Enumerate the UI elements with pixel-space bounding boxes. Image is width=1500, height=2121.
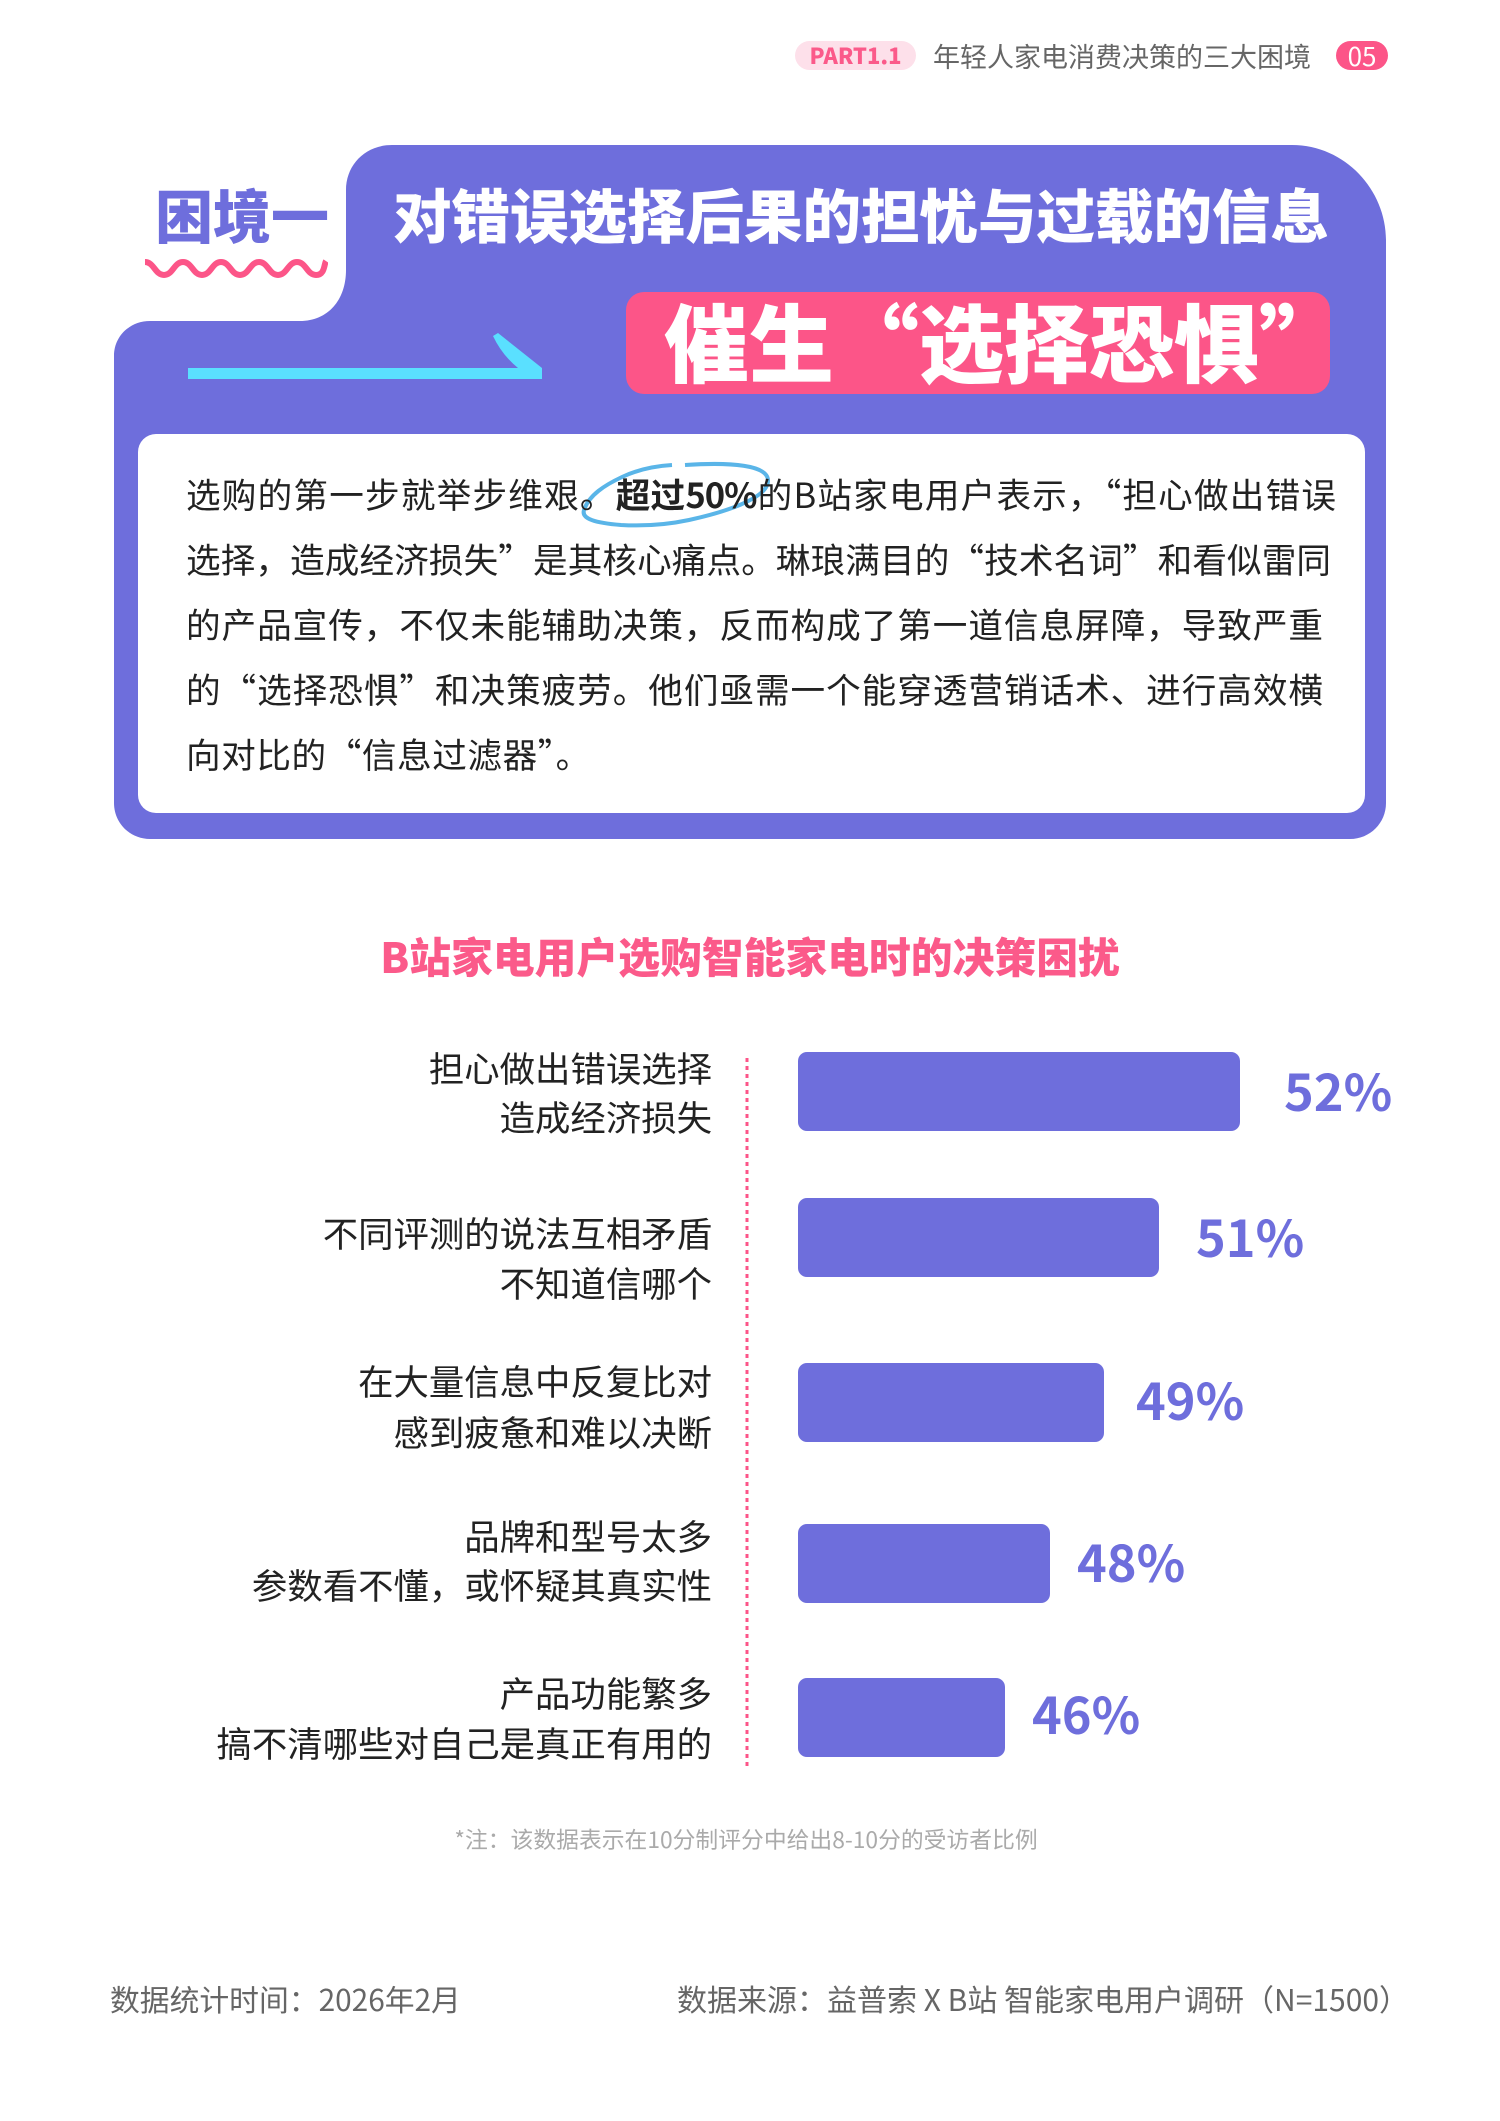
row 2 value: 51%: [1196, 1198, 1304, 1272]
body line 5: 向对比的“信息过滤器”。: [186, 728, 591, 778]
wavy underline: [145, 259, 328, 278]
panel: dilemma one: [114, 145, 1386, 839]
body paragraph highlight: [582, 462, 770, 528]
tag text: 困境一: [155, 171, 329, 255]
page number: [1336, 41, 1388, 70]
chart axis: [746, 1058, 748, 1766]
row 5: [217, 1667, 1140, 1768]
row 5 value: 46%: [1032, 1675, 1140, 1749]
arrow: [188, 333, 542, 379]
row 1 bar: [798, 1052, 1240, 1131]
row 4: [252, 1510, 1185, 1610]
row 1: 造成经济损失: [500, 1091, 712, 1142]
row 2: [323, 1198, 1304, 1308]
panel background: [114, 145, 1386, 839]
body line 4: 的“选择恐惧”和决策疲劳。他们亟需一个能穿透营销话术、进行高效横: [186, 663, 1323, 713]
highlight ellipse: [582, 462, 770, 528]
row 2: 不知道信哪个: [500, 1257, 712, 1308]
row 1 label: 担心做出错误选择: [429, 1042, 712, 1093]
row 3 bar: [798, 1363, 1104, 1442]
data period: 数据统计时间：2026年2月: [110, 1976, 461, 2020]
body line 3: 的产品宣传，不仅未能辅助决策，反而构成了第一道信息屏障，导致严重: [186, 598, 1323, 648]
row 3 value: 49%: [1136, 1361, 1244, 1435]
row 1 value: 52%: [1284, 1052, 1392, 1126]
panel title: 对错误选择后果的担忧与过载的信息: [393, 170, 1329, 255]
row 3: [358, 1355, 1244, 1457]
page number: 05: [1348, 37, 1376, 74]
data source: 数据来源：益普索 X B站 智能家电用户调研（N=1500）: [677, 1976, 1409, 2020]
row 3: 感到疲惫和难以决断: [393, 1406, 712, 1457]
callout text: 催生“选择恐惧”: [664, 278, 1344, 401]
row 4 value: 48%: [1077, 1523, 1185, 1597]
body line 2: 选择，造成经济损失”是其核心痛点。琳琅满目的“技术名词”和看似雷同: [186, 533, 1331, 583]
row 3 label: 在大量信息中反复比对: [358, 1355, 712, 1406]
footnote: *注：该数据表示在10分制评分中给出8-10分的受访者比例: [454, 1822, 1038, 1855]
row 4: 参数看不懂，或怀疑其真实性: [252, 1559, 712, 1610]
row 5 bar: [798, 1678, 1005, 1757]
header: [795, 36, 1388, 75]
row 1: [429, 1042, 1392, 1142]
text card: [138, 434, 1365, 813]
label tag: dilemma one: [145, 171, 329, 278]
chart title: B站家电用户选购智能家电时的决策困扰: [380, 926, 1120, 986]
row 2 bar: [798, 1198, 1159, 1277]
part tag: PART1.1: [809, 39, 902, 71]
row 4 label: 品牌和型号太多: [464, 1510, 712, 1561]
row 5 label: 产品功能繁多: [500, 1667, 712, 1718]
body line 1: 选购的第一步就举步维艰。超过50%的B站家电用户表示，“担心做出错误: [186, 468, 1336, 518]
header title: 年轻人家电消费决策的三大困境: [933, 36, 1311, 75]
pink callout: [626, 292, 1330, 394]
row 4 bar: [798, 1524, 1050, 1603]
row 2 label: 不同评测的说法互相矛盾: [323, 1207, 712, 1258]
row 5: 搞不清哪些对自己是真正有用的: [217, 1717, 712, 1768]
